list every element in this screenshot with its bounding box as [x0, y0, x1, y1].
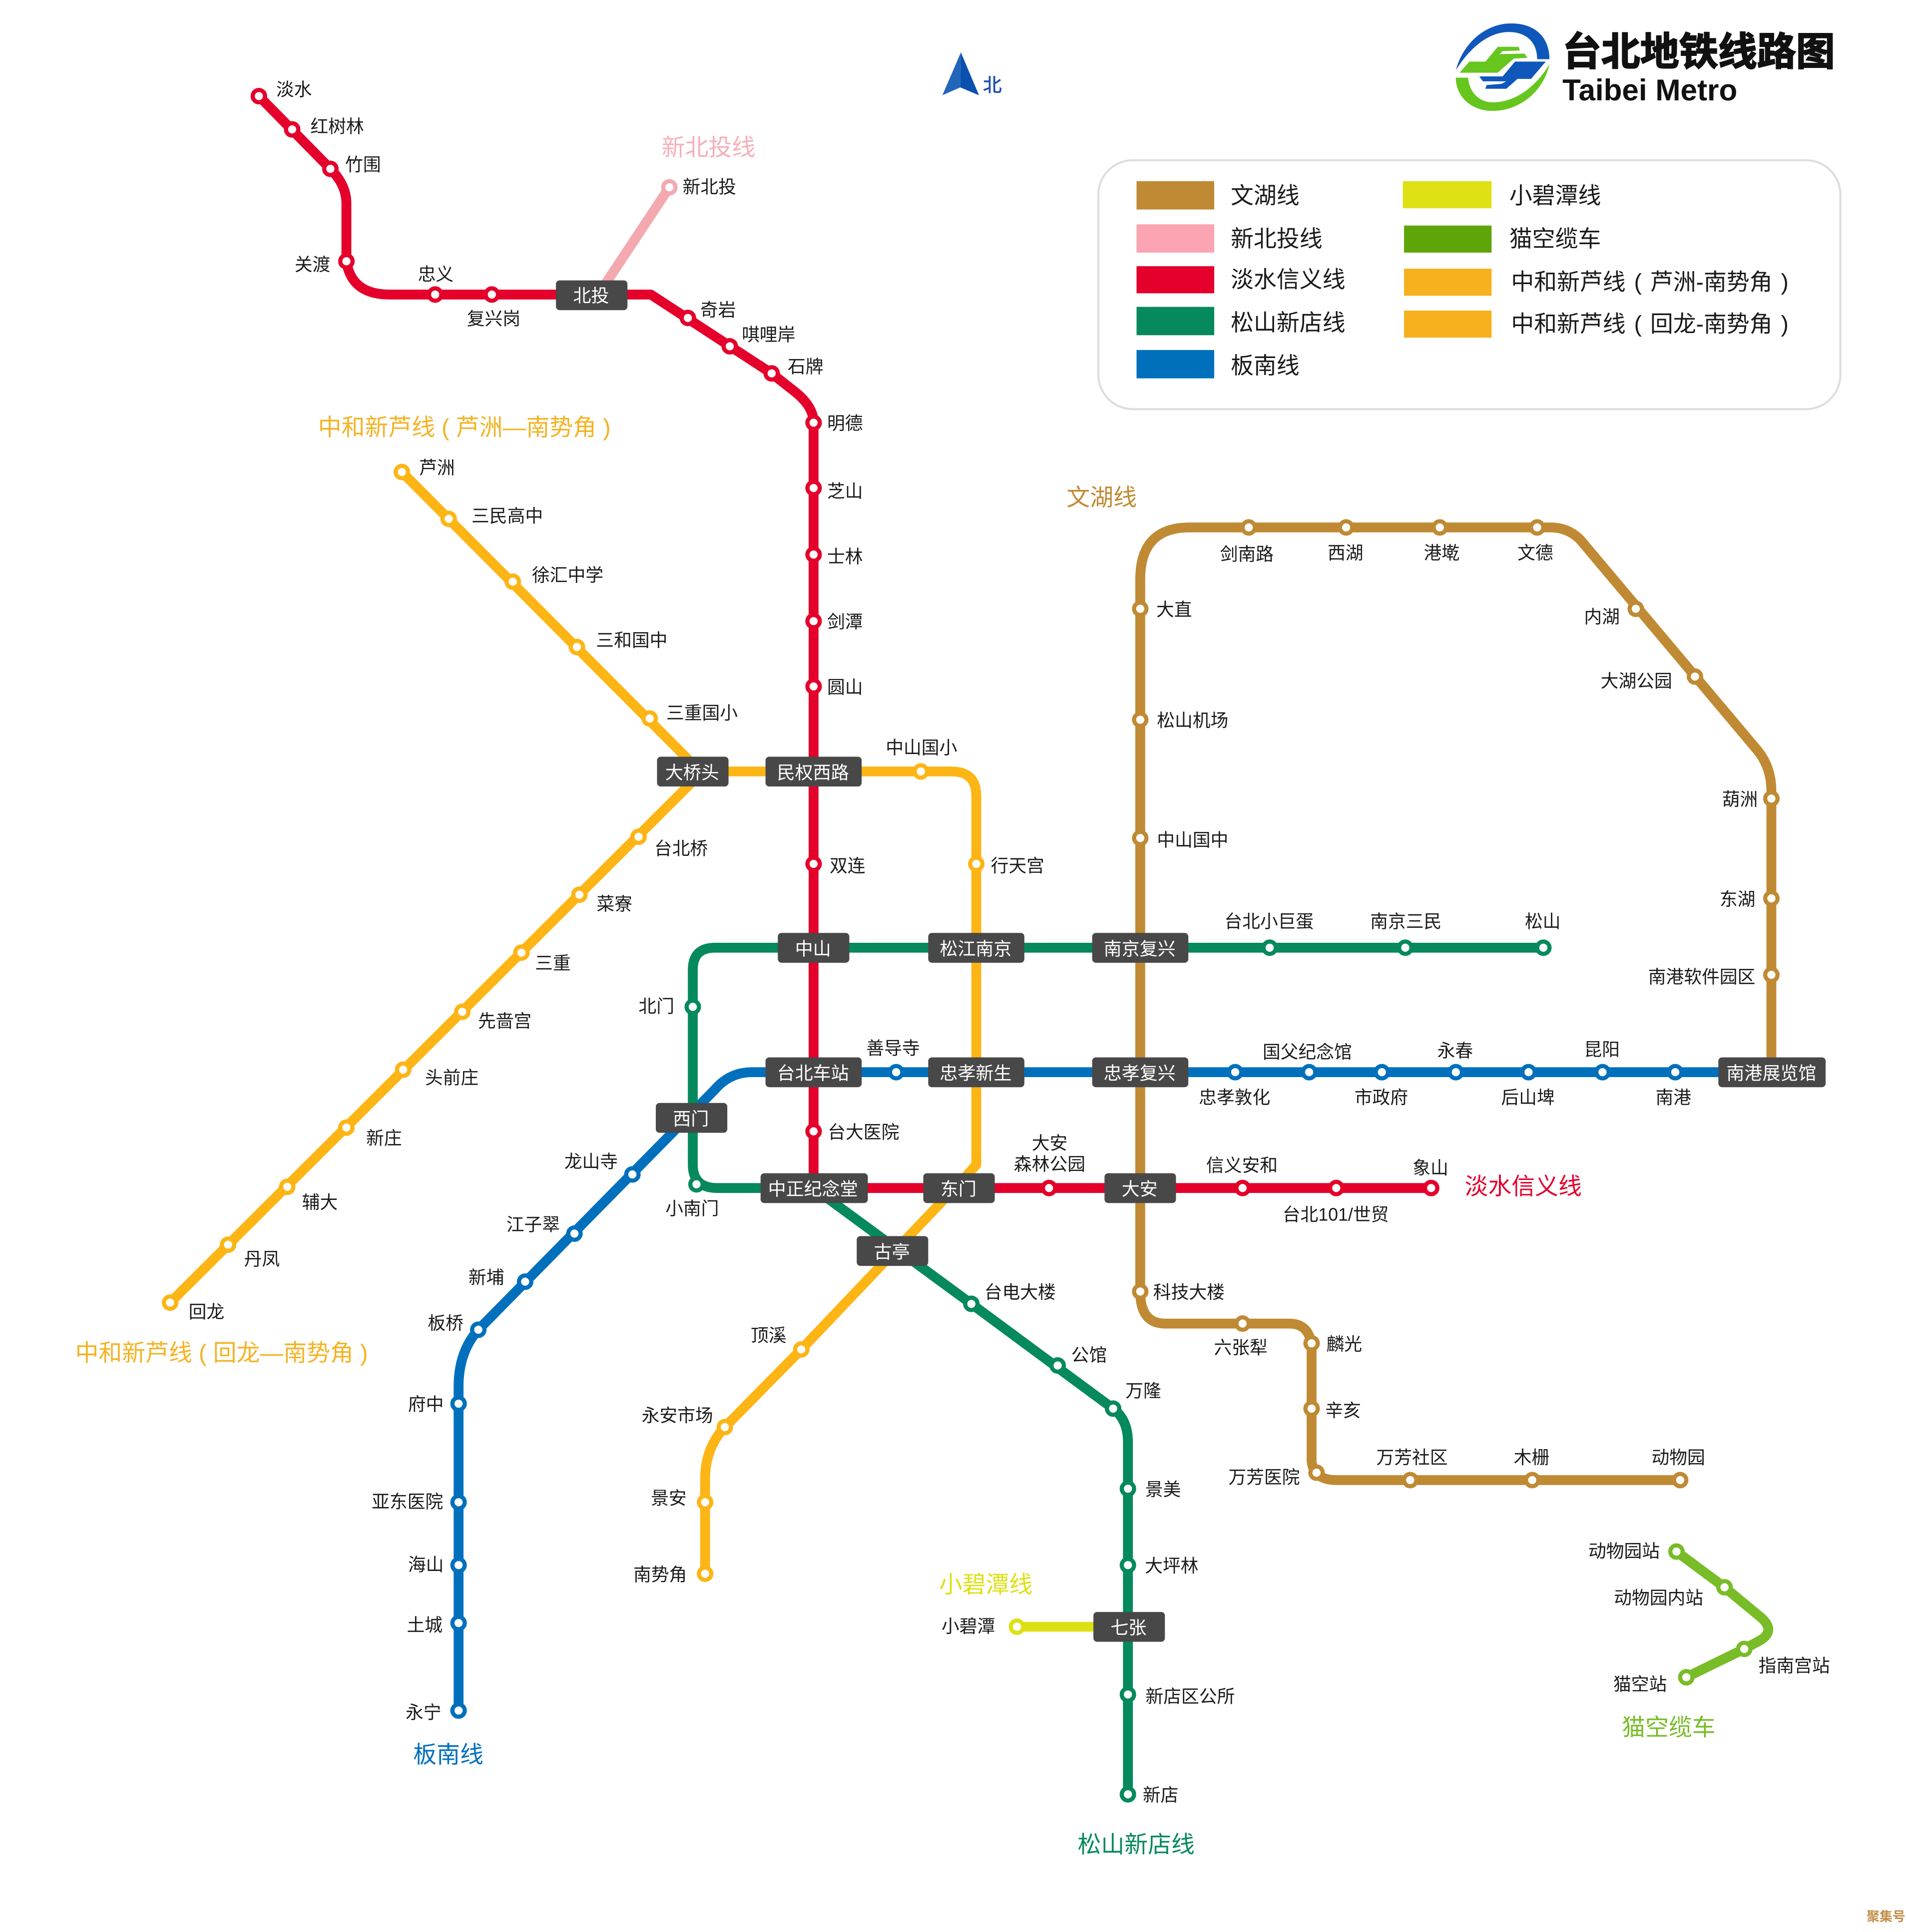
heading: 新北投线: 新北投线: [662, 135, 755, 161]
transfer: 南港展览馆: [1718, 1057, 1826, 1087]
station: 大湖公园: [1601, 671, 1701, 691]
heading: 中和新芦线 回龙—南势角: 中和新芦线 ( 回龙—南势角 ): [75, 1340, 368, 1366]
station: 红树林: 红树林: [310, 116, 364, 136]
station: 永宁: 永宁: [406, 1703, 442, 1723]
station: 新庄: 新庄: [366, 1129, 402, 1149]
station: 双连: 双连: [830, 856, 866, 876]
station: 菜寮: [573, 888, 632, 914]
station: 大湖公园: 大湖公园: [1601, 671, 1672, 691]
heading: 文湖线: 文湖线: [1066, 485, 1137, 511]
station: 士林: 士林: [827, 547, 863, 567]
track: 新北投线: [604, 187, 669, 286]
transfer: 松江南京: [928, 933, 1024, 963]
station: 新埔: 新埔: [469, 1268, 504, 1288]
station: 奇岩: 奇岩: [700, 300, 736, 320]
transfer: 七张: 七张: [1110, 1617, 1146, 1638]
station: 回龙: 回龙: [189, 1302, 224, 1322]
station: 南势角: 南势角: [633, 1564, 687, 1584]
transfer: 北投: [556, 280, 627, 310]
station: 竹围: [324, 155, 381, 175]
station: 松山: 松山: [1525, 911, 1560, 931]
station: 善导寺: 善导寺: [866, 1038, 920, 1058]
station: 善导寺: [866, 1038, 920, 1078]
station: 猫空站: [1613, 1671, 1693, 1694]
station: 顶溪: 顶溪: [751, 1326, 787, 1346]
heading: 小碧潭线: 小碧潭线: [939, 1571, 1032, 1597]
station: 台北小巨蛋: [1224, 911, 1314, 954]
station: 土城: [407, 1615, 465, 1635]
station: 先啬宫: [456, 1006, 531, 1031]
station: 公馆: 公馆: [1071, 1345, 1107, 1365]
station: 红树林: [286, 116, 364, 136]
station: 象山: 象山: [1413, 1158, 1448, 1178]
station: 永安市场: [642, 1406, 731, 1433]
station: 剑南路: [1220, 521, 1274, 564]
station: 土城: 土城: [407, 1615, 443, 1635]
station: 北门: [638, 997, 699, 1017]
station: 科技大楼: 科技大楼: [1153, 1282, 1225, 1302]
track: 松山新店线: [693, 948, 1543, 1794]
station: 永安市场: 永安市场: [642, 1406, 713, 1426]
line: 文湖线: [1134, 521, 1778, 1487]
station: 大直: [1134, 600, 1192, 620]
title: English: Taibei Metro: [1562, 73, 1737, 107]
transfer: 七张: [1093, 1612, 1165, 1642]
station: 东湖: [1720, 889, 1778, 909]
station: 小碧潭: 小碧潭: [942, 1616, 995, 1636]
line: 中和新芦线: [164, 458, 1044, 1584]
station: 三和国中: [571, 631, 667, 653]
station: 万芳社区: 万芳社区: [1377, 1448, 1448, 1468]
station: 麟光: 麟光: [1327, 1334, 1362, 1354]
station: 忠义: 忠义: [418, 265, 454, 285]
station: 三和国中: 三和国中: [596, 631, 667, 651]
station: 新店区公所: 新店区公所: [1145, 1687, 1235, 1707]
station: 菜寮: 菜寮: [597, 894, 632, 914]
station: 江子翠: [506, 1214, 580, 1240]
legend item: 文湖线: 文湖线: [1231, 183, 1300, 209]
line: 松山新店线: [638, 911, 1560, 1805]
station: 动物园内站: 动物园内站: [1614, 1588, 1703, 1608]
station: 淡水: 淡水: [276, 79, 312, 99]
legend item: 猫空缆车: 猫空缆车: [1509, 226, 1601, 252]
transfer: 松江南京: 松江南京: [940, 938, 1011, 959]
legend item: 猫空缆车: [1404, 226, 1601, 253]
station: 后山埤: [1501, 1066, 1555, 1108]
station: 西湖: 西湖: [1328, 543, 1364, 563]
station: 文德: 文德: [1517, 543, 1553, 563]
station: 龙山寺: 龙山寺: [564, 1152, 618, 1172]
station: 台北桥: [632, 830, 708, 859]
station: 市政府: [1355, 1066, 1408, 1108]
legend item: 小碧潭线: 小碧潭线: [1509, 183, 1601, 209]
transfer: 大安: [1104, 1173, 1176, 1203]
station: 国父纪念馆: 国父纪念馆: [1263, 1042, 1352, 1062]
station: 府中: [408, 1395, 465, 1415]
station: 大安森林公园: 大安: [1032, 1134, 1067, 1154]
station: 行天宫: 行天宫: [991, 856, 1044, 876]
station: 信义安和: 信义安和: [1206, 1156, 1278, 1175]
transfer: 中山: 中山: [795, 938, 831, 959]
transfer: 忠孝复兴: [1092, 1057, 1188, 1087]
line: 新北投线: [604, 177, 736, 286]
transfer: 中山: [778, 933, 849, 963]
legend item: 中和新芦线 芦洲-南势角: 中和新芦线 ( 芦洲-南势角 ): [1511, 269, 1789, 295]
legend item: 小碧潭线: [1403, 181, 1601, 209]
station: 辛亥: 辛亥: [1325, 1401, 1361, 1421]
track: 小碧潭线: [1017, 1625, 1109, 1629]
station: 台北101/世贸: 台北101/世贸: [1283, 1205, 1389, 1225]
station: 永宁: [406, 1703, 465, 1723]
station: 六张犁: 六张犁: [1214, 1338, 1268, 1358]
transfer: 古亭: 古亭: [874, 1241, 910, 1262]
station: 三民高中: 三民高中: [472, 506, 543, 526]
station: 明德: [808, 413, 863, 433]
station: 猫空站: 猫空站: [1613, 1674, 1667, 1694]
transfer: 南京复兴: [1092, 933, 1188, 963]
station: 圆山: 圆山: [827, 677, 863, 697]
legend item: 板南线: [1136, 350, 1300, 379]
station: 中山国中: 中山国中: [1157, 830, 1228, 850]
legend item: 中和新芦线 回龙-南势角: [1404, 311, 1789, 338]
station: 小碧潭: [942, 1616, 1023, 1636]
station: 永春: [1437, 1041, 1473, 1078]
station: 万隆: 万隆: [1125, 1381, 1161, 1401]
station: 忠孝敦化: 忠孝敦化: [1199, 1088, 1270, 1108]
heading: 猫空缆车: 猫空缆车: [1622, 1715, 1716, 1741]
station: 动物园内站: [1614, 1581, 1731, 1608]
station: 新店: 新店: [1143, 1785, 1178, 1805]
legend item: 新北投线: 新北投线: [1231, 226, 1323, 252]
icon: north arrow: [943, 52, 1002, 95]
legend item: 淡水信义线: [1136, 266, 1345, 293]
station: 芝山: 芝山: [827, 481, 863, 501]
station: 内湖: [1584, 603, 1642, 627]
station: 象山: [1413, 1158, 1448, 1194]
transfer: 大安: 大安: [1122, 1179, 1158, 1199]
track: 猫空缆车: [1676, 1551, 1768, 1677]
transfer: 大桥头: [657, 757, 729, 786]
station: 葫洲: 葫洲: [1722, 789, 1758, 809]
station: 竹围: 竹围: [345, 155, 381, 175]
station: 新埔: [469, 1268, 531, 1288]
station: 木栅: [1514, 1448, 1549, 1486]
logo: Taibei Metro emblem: [1456, 23, 1549, 111]
station: 龙山寺: [564, 1152, 638, 1180]
station: 信义安和: [1206, 1156, 1278, 1194]
transfer: 古亭: [857, 1236, 928, 1266]
station: 国父纪念馆: [1263, 1042, 1352, 1078]
legend item: 松山新店线: 松山新店线: [1231, 310, 1345, 336]
transfer: 民权西路: 民权西路: [777, 762, 849, 782]
station: 徐汇中学: [506, 565, 603, 588]
heading: 松山新店线: 松山新店线: [1078, 1832, 1195, 1858]
station: 六张犁: [1214, 1317, 1268, 1358]
track: 板南线: [459, 1072, 1771, 1711]
transfer: 忠孝复兴: 忠孝复兴: [1104, 1063, 1176, 1084]
heading: 中和新芦线 芦洲—南势角: 中和新芦线 ( 芦洲—南势角 ): [318, 414, 611, 440]
station: 动物园站: 动物园站: [1588, 1541, 1660, 1561]
station: 唭哩岸: 唭哩岸: [742, 325, 795, 345]
panel: legend: [1098, 160, 1841, 409]
legend item: 新北投线: [1136, 224, 1323, 253]
line: 板南线: [372, 1038, 1771, 1723]
heading: 板南线: 板南线: [413, 1742, 483, 1768]
station: 北门: 北门: [638, 997, 674, 1017]
station: 石牌: [766, 357, 824, 380]
station: 新店: [1122, 1785, 1178, 1805]
station: 徐汇中学: 徐汇中学: [532, 565, 603, 585]
station: 南港: [1655, 1066, 1691, 1108]
transfer: 民权西路: [766, 757, 862, 786]
transfer stations: [556, 280, 1826, 1642]
station: 指南宫站: 指南宫站: [1759, 1656, 1830, 1676]
station: 剑南路: 剑南路: [1220, 544, 1274, 564]
station: 公馆: [1051, 1345, 1107, 1372]
station: 回龙: [164, 1296, 224, 1322]
station: 剑潭: [808, 612, 863, 632]
transfer: 大桥头: 大桥头: [665, 762, 719, 782]
station: 淡水: [253, 79, 312, 102]
station: 新北投: 新北投: [683, 177, 736, 197]
station: 关渡: [295, 255, 353, 275]
transfer: 西门: [656, 1103, 727, 1133]
legend item: 文湖线: [1136, 181, 1300, 210]
station: 指南宫站: [1738, 1643, 1830, 1676]
station: 后山埤: 后山埤: [1501, 1088, 1555, 1108]
station: 忠义: [418, 265, 454, 301]
station: 三重国小: 三重国小: [666, 703, 738, 723]
station: 江子翠: 江子翠: [506, 1214, 560, 1234]
station: 市政府: 市政府: [1355, 1088, 1408, 1108]
station: 永春: 永春: [1437, 1041, 1473, 1061]
station: 唭哩岸: [724, 325, 795, 353]
legend item: 中和新芦线 芦洲-南势角: [1404, 269, 1789, 296]
legend item: 中和新芦线 回龙-南势角: 中和新芦线 ( 回龙-南势角 ): [1511, 311, 1789, 337]
station: 南京三民: [1370, 911, 1441, 954]
station: 台北小巨蛋: 台北小巨蛋: [1224, 911, 1314, 931]
station: 剑潭: 剑潭: [827, 612, 863, 632]
station: 昆阳: [1584, 1040, 1620, 1078]
station: 万芳社区: [1377, 1448, 1448, 1486]
station: 景美: [1122, 1480, 1181, 1500]
station: 昆阳: 昆阳: [1584, 1040, 1620, 1060]
station: 先啬宫: 先啬宫: [478, 1011, 531, 1031]
station: 小南门: 小南门: [665, 1198, 719, 1218]
station: 丹凤: 丹凤: [244, 1249, 280, 1269]
station: 石牌: 石牌: [788, 357, 824, 377]
station: 忠孝敦化: [1199, 1066, 1270, 1108]
station: 港墘: 港墘: [1424, 543, 1459, 563]
station: 关渡: 关渡: [295, 255, 330, 275]
station: 松山机场: 松山机场: [1157, 711, 1228, 731]
transfer: 东门: [924, 1173, 995, 1203]
station: 内湖: 内湖: [1584, 607, 1620, 627]
station: 万芳医院: 万芳医院: [1228, 1467, 1300, 1487]
track: 淡水信义线: [259, 96, 1431, 1188]
station: 奇岩: [682, 300, 736, 324]
station: 海山: 海山: [408, 1555, 444, 1575]
icon: north arrow: 北: [983, 74, 1002, 95]
station: 大坪林: [1122, 1556, 1198, 1576]
station: 动物园: 动物园: [1651, 1448, 1705, 1468]
station: 芝山: [808, 481, 863, 501]
line: 猫空缆车: [1588, 1541, 1830, 1694]
station: 芦洲: [396, 458, 455, 478]
watermark: 聚集号: [1867, 1910, 1906, 1924]
station: 板桥: [428, 1313, 484, 1336]
station: 海山: [408, 1555, 465, 1575]
station: 南港软件园区: 南港软件园区: [1648, 967, 1755, 987]
station: 辅大: [281, 1180, 338, 1212]
station: 中山国小: [886, 738, 957, 777]
station: 木栅: 木栅: [1514, 1448, 1549, 1468]
station: 顶溪: [751, 1326, 808, 1356]
station: 动物园: [1651, 1448, 1705, 1486]
station: 新庄: [340, 1122, 402, 1149]
station: 景安: [651, 1488, 711, 1509]
station: 台电大楼: [965, 1282, 1056, 1310]
legend item: 松山新店线: [1136, 307, 1345, 336]
transfer: 南港展览馆: 南港展览馆: [1726, 1063, 1817, 1084]
line: 淡水信义线: [253, 79, 1448, 1225]
station: 文德: [1517, 521, 1553, 563]
station: 芦洲: 芦洲: [419, 458, 455, 478]
station: 士林: [808, 547, 863, 567]
station: 明德: 明德: [827, 413, 863, 433]
transfer: 台北车站: [766, 1057, 862, 1087]
transfer: 北投: 北投: [573, 285, 609, 306]
station: 板桥: 板桥: [428, 1313, 464, 1333]
station: 双连: [808, 856, 866, 876]
heading: 淡水信义线: 淡水信义线: [1464, 1173, 1582, 1199]
transfer: 东门: 东门: [941, 1179, 976, 1199]
station: 头前庄: [397, 1064, 478, 1088]
station: 中山国小: 中山国小: [886, 738, 957, 758]
station: 大直: 大直: [1156, 600, 1192, 620]
station: 台大医院: 台大医院: [828, 1122, 899, 1142]
station: 复兴岗: [467, 288, 520, 329]
title: Chinese: 台北地铁线路图: [1562, 30, 1835, 74]
legend item: 淡水信义线: 淡水信义线: [1231, 266, 1345, 292]
station: 头前庄: 头前庄: [425, 1068, 478, 1088]
station: 辛亥: [1306, 1401, 1361, 1421]
station: 景美: 景美: [1145, 1480, 1181, 1500]
station: 台北桥: 台北桥: [654, 839, 708, 859]
station: 小南门: [665, 1178, 719, 1218]
station: 港墘: [1424, 521, 1459, 563]
station: 大安森林公园: 森林公园: [1014, 1154, 1085, 1174]
station: 亚东医院: 亚东医院: [372, 1492, 443, 1512]
station: 南京三民: 南京三民: [1370, 911, 1441, 931]
transfer: 中正纪念堂: 中正纪念堂: [768, 1179, 858, 1199]
station: 景安: 景安: [651, 1488, 687, 1508]
station: 麟光: [1306, 1334, 1362, 1354]
transfer: 南京复兴: 南京复兴: [1104, 938, 1176, 959]
transfer: 西门: 西门: [673, 1109, 709, 1129]
station: 三重: 三重: [535, 953, 571, 973]
station: 台电大楼: 台电大楼: [984, 1282, 1056, 1302]
station: 大坪林: 大坪林: [1145, 1556, 1198, 1576]
station: 南港: 南港: [1655, 1088, 1691, 1108]
transfer: 中正纪念堂: [761, 1173, 868, 1203]
station: 复兴岗: 复兴岗: [467, 309, 520, 329]
transfer: 忠孝新生: 忠孝新生: [940, 1063, 1011, 1084]
transfer: 忠孝新生: [928, 1057, 1024, 1087]
station: 东湖: 东湖: [1720, 889, 1755, 909]
station: 南势角: [633, 1564, 711, 1584]
station: 辅大: 辅大: [302, 1192, 338, 1212]
station: 大安森林公园: [1014, 1134, 1085, 1194]
track: 文湖线: [1140, 527, 1771, 1480]
line: 小碧潭线: [942, 1616, 1109, 1636]
legend item: 板南线: 板南线: [1231, 353, 1300, 379]
station: 葫洲: [1722, 789, 1778, 809]
station: 府中: 府中: [408, 1395, 444, 1415]
station: 台北101/世贸: [1283, 1182, 1389, 1225]
track: 中和新芦线: [170, 472, 976, 1574]
transfer: 台北车站: 台北车站: [777, 1063, 849, 1084]
station: 西湖: [1328, 521, 1364, 563]
station: 丹凤: [222, 1238, 280, 1269]
station: 松山: [1525, 911, 1560, 954]
station: 圆山: [808, 677, 863, 697]
station: 万隆: [1107, 1381, 1161, 1415]
station: 三重: [515, 946, 571, 973]
